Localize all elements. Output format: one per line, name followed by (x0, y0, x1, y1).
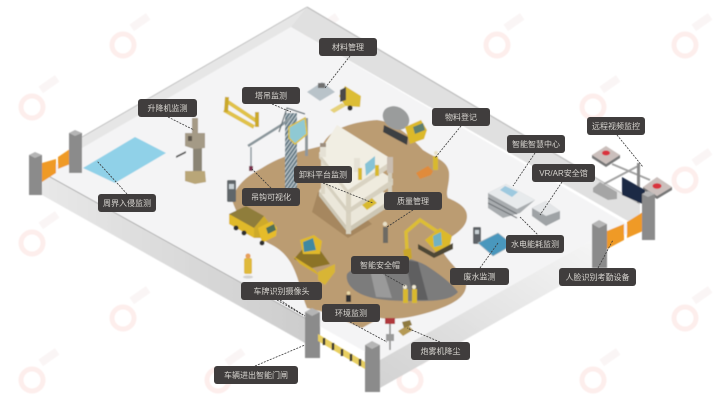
label: 吊钩可视化: 吊钩可视化 (251, 192, 291, 202)
icon: orange material pile (416, 166, 433, 179)
label: 人脸识别考勤设备 (559, 268, 636, 286)
label: 材料管理: 材料管理 (332, 42, 364, 52)
icon: construction hoist (176, 118, 206, 184)
front left wall (42, 173, 305, 343)
label: 物料登记: 物料登记 (445, 112, 477, 122)
icon: remote video monitoring (592, 146, 672, 205)
perimeter gate left (29, 130, 82, 195)
icon: excavator (403, 220, 453, 262)
icon: smart center servers (488, 184, 535, 218)
icon: dump truck (229, 206, 277, 246)
label: 车牌识别摄像头: 车牌识别摄像头 (254, 286, 310, 296)
icon: water meter cabinet (473, 227, 481, 244)
icon: environment monitor (385, 318, 395, 350)
label: 升降机监测 (138, 99, 197, 117)
label: 废水监测 (450, 268, 509, 285)
label: 车辆进出智能门闸 (214, 366, 298, 384)
label: 塔吊监测 (242, 87, 300, 104)
face recognition gate right (592, 191, 655, 268)
icon: building under construction (319, 125, 393, 234)
label: 质量管理 (384, 192, 442, 210)
icon: quality inspector (383, 222, 388, 243)
label: 塔吊监测: 塔吊监测 (255, 90, 287, 100)
label: 远程视频监控: 远程视频监控 (592, 121, 640, 131)
vehicle gate barrier (305, 308, 380, 392)
label: 车牌识别摄像头 (241, 282, 322, 300)
label: 周界入侵监测: 周界入侵监测 (103, 198, 151, 208)
label: 周界入侵监测 (98, 194, 156, 212)
label: 水电能耗监测 (506, 235, 564, 253)
label: 质量管理: 质量管理 (397, 196, 429, 206)
label: 人脸识别考勤设备: 人脸识别考勤设备 (566, 272, 630, 282)
label: 远程视频监控 (587, 117, 645, 135)
icon: workers in pit (403, 285, 417, 303)
label: 环境监测 (322, 304, 380, 322)
icon: tower crane (248, 108, 308, 189)
icon: yellow beam frame (224, 97, 258, 127)
icon: VR/AR hall (532, 201, 560, 226)
back left wall (82, 7, 307, 148)
label: 材料管理 (319, 38, 377, 56)
icon: worker at registration (433, 151, 438, 170)
label: 卸料平台监测: 卸料平台监测 (299, 170, 347, 180)
icon: bulldozer (293, 235, 335, 285)
site floor (43, 27, 640, 360)
icon: meter cabinet left (227, 180, 236, 202)
label: 炮雾机降尘 (411, 342, 470, 360)
icon: mixer truck (378, 101, 427, 145)
perimeter intrusion zone (83, 137, 166, 183)
label: VR/AR安全馆 (532, 164, 595, 182)
icon: small worker (346, 291, 351, 302)
connector lines (97, 56, 643, 366)
excavation pit (347, 257, 458, 301)
building shadow (312, 192, 372, 238)
icon: forklift (330, 86, 361, 113)
icon: worker by wall (243, 253, 253, 279)
label: 智能安全帽: 智能安全帽 (360, 260, 400, 270)
ground: brown earth area (232, 120, 467, 328)
label: 废水监测: 废水监测 (464, 272, 496, 282)
back right wall (291, 7, 640, 228)
front right wall (380, 240, 592, 388)
label group (98, 38, 645, 384)
label: 水电能耗监测: 水电能耗监测 (511, 239, 559, 249)
label: 智能智慧中心: 智能智慧中心 (512, 139, 560, 149)
label: 吊钩可视化 (242, 188, 300, 206)
icon: material pallet (307, 82, 335, 101)
label: 物料登记 (432, 108, 490, 126)
label: 车辆进出智能门闸: 车辆进出智能门闸 (224, 370, 288, 380)
label: 升降机监测: 升降机监测 (148, 103, 188, 113)
label: 卸料平台监测 (294, 166, 352, 183)
label: 智能安全帽 (351, 256, 409, 274)
label: 环境监测: 环境监测 (335, 308, 367, 318)
label: 智能智慧中心 (507, 135, 565, 153)
icon: fog cannon (398, 320, 413, 336)
icon: wastewater pool (478, 233, 507, 256)
label: VR/AR安全馆: VR/AR安全馆 (539, 168, 588, 178)
label: 炮雾机降尘: 炮雾机降尘 (420, 346, 460, 356)
